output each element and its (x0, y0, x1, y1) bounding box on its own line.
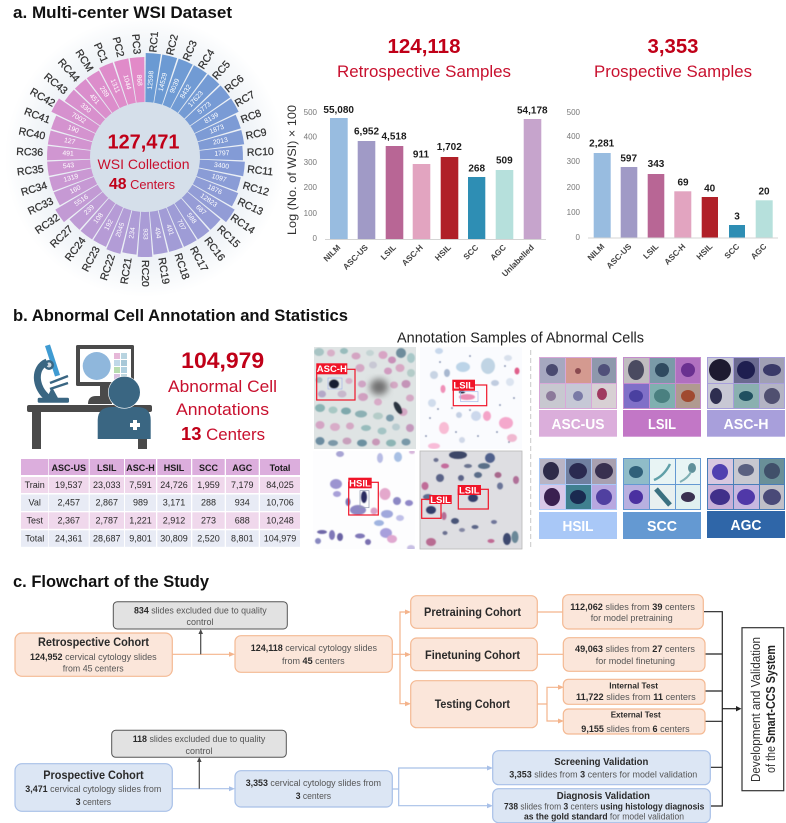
sector: RC10 (195, 145, 274, 162)
sector: RC18: 491 (164, 224, 175, 237)
sector: RC36: 491 (62, 150, 74, 158)
table: annotation counts by split: 3,171 (163, 498, 185, 508)
tile: HSIL: HSIL (562, 518, 594, 535)
sector: RC34: RC34 (20, 180, 49, 199)
sector: RC7: 8139 (203, 112, 220, 125)
bar chart: retrospective samples: 54,178 (517, 106, 548, 116)
sector: RC41: RC41 (22, 106, 52, 126)
table: annotation counts by split (21, 459, 300, 547)
bar chart: retrospective samples: 500 (304, 108, 318, 117)
sector: RC36 (16, 145, 95, 162)
box: prospective cohort: 3,471 cervical cytology slides from (25, 784, 161, 795)
box: pretraining cohort (411, 596, 537, 628)
sector: RCM (72, 47, 124, 119)
table: annotation counts by split: 2,520 (197, 534, 220, 544)
icon: pathologist at microscope and monitor (27, 344, 152, 449)
sector: RC44: RC44 (55, 57, 82, 85)
flow lines: retrospective connectors (172, 610, 564, 724)
chart: circular bar chart of WSI collection by center (5, 17, 285, 297)
sector: RC18 (154, 202, 193, 282)
sector: RC43: RC43 (41, 71, 70, 97)
sector: RC22: RC22 (98, 253, 118, 282)
sector: RC24: RC24 (63, 235, 89, 264)
box: internal test: Internal Test (609, 681, 658, 691)
sector: RC20: 933 (142, 228, 148, 240)
heading: annotation samples: Annotation Samples of Abnormal Cells (397, 330, 644, 347)
box: pretraining slides (563, 595, 703, 629)
tile: HSIL (539, 458, 617, 539)
callout: abnormal cell annotations (168, 348, 277, 444)
micrograph: ASC-H annotation sample (314, 347, 416, 449)
box: diagnosis validation: 738 slides from 3 centers using histology diagnosis (504, 802, 704, 812)
table: annotation counts by split: 9,801 (129, 534, 152, 544)
bar chart: retrospective samples: 4,518 (381, 132, 407, 142)
sector: RC20: RC20 (139, 260, 151, 287)
sector: RC40 (17, 124, 97, 154)
center disc with collection totals: WSI Collection (98, 156, 190, 172)
sector: RC42 (27, 84, 106, 139)
sector: PC2: PC2 (110, 36, 126, 59)
sector: RC14: 12823 (199, 192, 218, 209)
box: 124,118 slides (235, 636, 392, 672)
callout: abnormal cell annotations: 104,979 (181, 348, 264, 373)
box: 834 slides excluded (113, 602, 287, 629)
table: annotation counts by split: 2,867 (96, 498, 118, 508)
table: annotation counts by split: Train (25, 480, 45, 490)
sector: RC10: 1797 (214, 150, 230, 158)
center disc with collection totals: 48 Centers (109, 176, 175, 193)
box: diagnosis validation (493, 789, 710, 823)
sector: RC23: 192 (103, 218, 115, 232)
sector: RC1: RC1 (147, 31, 161, 53)
flow lines: prospective connectors (172, 757, 493, 808)
sector: PC2: 1044 (121, 74, 132, 91)
table: annotation counts by split: 1,959 (197, 480, 220, 490)
bar chart: retrospective samples: ASC-H (400, 243, 425, 268)
box: retrospective cohort: from 45 centers (63, 664, 124, 675)
bar chart: retrospective samples (304, 105, 548, 279)
sector: RC8 (189, 106, 264, 146)
table: annotation counts by split: 1,221 (129, 516, 152, 526)
sector: RC4: 8432 (179, 83, 193, 100)
sector: RC7: RC7 (233, 89, 257, 110)
sector: RC19: RC19 (155, 257, 172, 285)
sector: RCM: 289 (98, 85, 110, 99)
box: testing cohort: Testing Cohort (435, 699, 510, 711)
box: internal test: 11,722 slides from 11 centers (576, 692, 696, 703)
table: annotation counts by split: AGC (232, 463, 253, 473)
sector: RC36: RC36 (16, 146, 43, 159)
sector: RC43 (41, 70, 111, 131)
bar chart: prospective samples: 597 (620, 154, 637, 164)
sector: RC34 (19, 164, 99, 200)
sector: RC6: 5773 (197, 101, 213, 116)
sector: RC17: RC17 (187, 245, 210, 274)
box: diagnosis validation: Diagnosis Validation (557, 790, 650, 802)
sector: RC15: RC15 (214, 223, 242, 251)
bar chart: prospective samples: 100 (567, 208, 581, 217)
tile: LSIL: LSIL (648, 416, 676, 433)
table: annotation counts by split: 688 (235, 516, 250, 526)
sector: RC12 (191, 164, 271, 200)
bar chart: retrospective samples: ASC-US (341, 243, 370, 272)
bar chart: prospective samples: LSIL (641, 242, 660, 261)
box: testing cohort (411, 681, 537, 728)
sector: RC12: RC12 (241, 180, 271, 199)
sector: RC13: 1876 (206, 184, 223, 197)
box: 118 slides excluded (112, 730, 286, 757)
table: annotation counts by split: Val (29, 498, 41, 508)
sector: RC10: RC10 (247, 146, 274, 159)
table: annotation counts by split: 273 (201, 516, 216, 526)
table: annotation counts by split: 19,537 (55, 480, 83, 490)
sector: RC5: RC5 (210, 59, 233, 82)
bar chart: prospective samples (567, 108, 778, 271)
box: 834 slides excluded: control (186, 617, 214, 628)
sector: RC21: 234 (128, 227, 137, 239)
tile: ASC-US: ASC-US (552, 416, 604, 433)
box: 834 slides excluded: 834 slides excluded due to quality (134, 605, 267, 616)
sector: RC8: RC8 (239, 107, 263, 126)
bar chart: prospective samples: AGC (749, 242, 768, 261)
sector: RC17: 707 (175, 219, 187, 232)
bar chart: retrospective samples: Unlabelled (500, 243, 536, 279)
sector: RC18: RC18 (172, 252, 192, 281)
sector: PC3 (128, 33, 148, 108)
bar chart: retrospective samples: SCC (462, 243, 480, 262)
heading: section b: b. Abnormal Cell Annotation and Statistics (13, 307, 348, 325)
sector: RC3 (158, 38, 201, 114)
table: annotation counts by split: 23,033 (93, 480, 121, 490)
sector: RC27: RC27 (48, 223, 76, 251)
sector: RC13: RC13 (235, 196, 265, 218)
sector: RC6 (179, 71, 248, 131)
table: annotation counts by split: 24,726 (160, 480, 188, 490)
box: prospective cohort: Prospective Cohort (43, 768, 144, 782)
heading: retrospective samples total: Retrospective Samples (337, 62, 511, 81)
sector: RC40: RC40 (18, 125, 46, 143)
bar chart: retrospective samples: 509 (496, 156, 513, 166)
sector: PC1: PC1 (91, 41, 110, 65)
bar chart: prospective samples: 3 (734, 212, 740, 222)
bar chart: prospective samples: ASC-US (605, 242, 634, 271)
sector: RC5: 17623 (187, 90, 205, 109)
box: pretraining cohort: Pretraining Cohort (424, 607, 521, 619)
box: retrospective cohort: Retrospective Cohort (38, 637, 149, 649)
sector: RC33: RC33 (26, 195, 56, 218)
bar chart: retrospective samples: 300 (304, 158, 318, 167)
table: annotation counts by split: 2,912 (163, 516, 185, 526)
bar chart: retrospective samples: LSIL (379, 243, 398, 262)
table: annotation counts by split: 10,706 (266, 498, 294, 508)
sector: RC1 (141, 31, 163, 108)
sector: RC34: 1319 (63, 173, 80, 184)
sector: RC7 (184, 87, 258, 139)
sector: RC43: 330 (79, 102, 92, 115)
sector: RC11: 3400 (214, 162, 230, 171)
box: finetuning cohort: Finetuning Cohort (425, 650, 520, 662)
tile: LSIL (623, 357, 701, 437)
sector: RC41: 190 (66, 124, 80, 135)
sector: RC21: RC21 (118, 257, 135, 285)
bar chart: retrospective samples: 55,080 (323, 105, 354, 116)
bar chart: prospective samples: 500 (567, 108, 581, 117)
callout: abnormal cell annotations: 13 Centers (181, 424, 265, 444)
bar chart: prospective samples: 400 (567, 132, 581, 141)
sector: RC14 (182, 179, 258, 238)
sector: RC11 (194, 156, 274, 180)
bar chart: retrospective samples: 100 (304, 209, 318, 218)
sector: RC9: RC9 (245, 126, 268, 142)
sector: RC32 (32, 179, 108, 238)
sector: RC27: 239 (83, 204, 96, 217)
table: annotation counts by split: ASC-US (52, 463, 86, 473)
bar chart: prospective samples: NILM (586, 242, 607, 263)
table: annotation counts by split: ASC-H (126, 463, 155, 473)
heading: prospective samples total: 3,353 (648, 36, 698, 58)
heading: section a: a. Multi-center WSI Dataset (13, 4, 233, 22)
sector: RC22: 2045 (115, 222, 126, 238)
sector: RC16: 588 (185, 212, 198, 225)
bar chart: retrospective samples: NILM (322, 243, 343, 264)
sector: RC24: 108 (93, 212, 105, 225)
sector: RC2 (150, 33, 182, 110)
box: screening validation: 3,353 slides from 3 centers for model validation (509, 770, 697, 781)
sector: RC33 (26, 172, 103, 219)
table: annotation counts by split: SCC (199, 463, 218, 473)
sector: RC19: 494 (153, 227, 162, 239)
sector: RC15: 687 (194, 204, 207, 217)
bar chart: prospective samples: 69 (677, 178, 689, 188)
box: retrospective cohort (15, 633, 172, 676)
tile: AGC: AGC (730, 517, 762, 534)
sector: RC22 (97, 202, 136, 282)
tile: SCC: SCC (647, 518, 677, 535)
sector: PC2 (108, 35, 140, 110)
bar chart: retrospective samples: HSIL (433, 243, 453, 263)
table: annotation counts by split: 2,787 (96, 516, 118, 526)
box: external test: External Test (611, 710, 661, 720)
center disc with collection totals: 127,471 (108, 132, 180, 154)
sector: RC44: 451 (88, 93, 101, 106)
sector: RC9 (193, 125, 268, 154)
table: annotation counts by split: 2,367 (58, 516, 80, 526)
bar chart: retrospective samples: 911 (413, 150, 430, 160)
box: finetuning slides: for model finetuning (596, 656, 675, 667)
box: 3,353 slides: 3,353 cervical cytology slides from (246, 778, 381, 789)
micrograph: two LSIL annotation samples: LSIL (430, 495, 451, 506)
micrograph: HSIL annotation sample: HSIL (349, 478, 371, 489)
bar chart: prospective samples: HSIL (695, 242, 714, 262)
callout: abnormal cell annotations: Abnormal Cell (168, 378, 277, 396)
box: 124,118 slides: from 45 centers (282, 656, 345, 667)
bar chart: retrospective samples: 400 (304, 132, 318, 141)
sector: RC40: 127 (63, 137, 76, 146)
box: diagnosis validation: as the gold standard for model validation (524, 812, 684, 822)
sector: RC3: 9039 (169, 78, 181, 95)
sector: RC3: RC3 (181, 39, 200, 63)
micrograph: two LSIL annotation samples (420, 451, 522, 549)
table: annotation counts by split: 7,591 (129, 480, 152, 490)
micrograph: ASC-H annotation sample: ASC-H (317, 364, 347, 375)
table: annotation counts by split: 2,457 (58, 498, 80, 508)
tile: ASC-H: ASC-H (724, 416, 768, 433)
sector: RC4 (165, 46, 219, 119)
tile: ASC-H (707, 357, 785, 437)
tile: ASC-US (539, 357, 617, 437)
bar chart: retrospective samples: 268 (468, 164, 485, 174)
box: 124,118 slides: 124,118 cervical cytology slides (251, 643, 377, 654)
sector: RC16 (169, 193, 228, 264)
flow lines: convergence to system box (704, 612, 742, 806)
sector: RC1: 12598 (147, 70, 155, 90)
sector: RC8: 1873 (209, 124, 225, 136)
tile: SCC (623, 458, 701, 539)
sector: RC35: RC35 (16, 163, 45, 178)
sector: RC42: RC42 (28, 86, 57, 110)
bar chart: retrospective samples: 0 (313, 234, 318, 243)
sector: RC17 (162, 198, 211, 275)
bar chart: prospective samples: ASC-H (663, 242, 687, 267)
table: annotation counts by split: LSIL (97, 463, 117, 473)
box: internal test (563, 679, 705, 704)
table: annotation counts by split: Total (270, 463, 290, 473)
sector: RC13 (187, 172, 266, 219)
bar chart: retrospective samples: 200 (304, 183, 318, 192)
sector: RC33: 160 (69, 184, 82, 196)
sector: RC2: 14529 (158, 72, 169, 92)
box: prospective cohort: 3 centers (76, 797, 111, 808)
sector: RC27 (47, 186, 114, 251)
sector: RC32: 5516 (73, 193, 90, 208)
bar chart: retrospective samples: 6,952 (354, 126, 379, 138)
bar chart: prospective samples: 0 (576, 233, 581, 242)
table: annotation counts by split: 7,179 (231, 480, 254, 490)
sector: RC15 (176, 186, 243, 251)
micrograph: LSIL annotation sample (420, 347, 522, 449)
bar chart: retrospective samples: AGC (489, 243, 508, 262)
box: pretraining slides: for model pretraining (591, 613, 673, 624)
table: annotation counts by split: 8,801 (231, 534, 254, 544)
box: pretraining slides: 112,062 slides from 39 centers (570, 602, 695, 613)
box: screening validation (493, 751, 710, 785)
table: annotation counts by split: Test (26, 516, 43, 526)
micrograph: two LSIL annotation samples: LSIL (459, 486, 480, 496)
sector: RC2: RC2 (164, 33, 181, 56)
box: retrospective cohort: 124,952 cervical cytology slides (30, 652, 157, 663)
micrograph: LSIL annotation sample: LSIL (453, 381, 474, 392)
box: 118 slides excluded: control (186, 746, 212, 757)
bar chart: prospective samples: 40 (704, 184, 716, 194)
table: annotation counts by split: 104,979 (264, 534, 296, 544)
sector: RC41 (22, 105, 101, 146)
bar chart: prospective samples: 2,281 (589, 138, 615, 150)
table: annotation counts by split: HSIL (164, 463, 185, 473)
sector: RC16: RC16 (201, 235, 227, 264)
box: 118 slides excluded: 118 slides excluded due to quality (133, 734, 266, 745)
bar chart: prospective samples: 200 (567, 183, 581, 192)
table: annotation counts by split: 934 (235, 498, 250, 508)
heading: retrospective samples total (337, 36, 511, 81)
sector: RCM: RCM (73, 47, 96, 74)
box: development and validation of the Smart-CCS system: of the Smart-CCS System (764, 645, 778, 773)
box: development and validation of the Smart-CCS system: Development and Validation (749, 637, 763, 782)
sector: RC14: RC14 (228, 212, 257, 237)
box: prospective cohort (15, 764, 172, 811)
sector: RC6: RC6 (223, 73, 247, 95)
table: annotation counts by split: 10,248 (266, 516, 294, 526)
table: annotation counts by split: Total (25, 534, 44, 544)
table: annotation counts by split: 30,809 (160, 534, 188, 544)
box: external test: 9,155 slides from 6 centers (581, 724, 690, 735)
sector: RC32: RC32 (33, 212, 62, 237)
table: annotation counts by split: 24,361 (55, 534, 83, 544)
box: 3,353 slides (235, 771, 392, 807)
sector: PC3: 868 (135, 74, 143, 86)
sector: RC19 (146, 205, 173, 285)
heading: prospective samples total: Prospective Samples (594, 62, 752, 81)
micrograph: HSIL annotation sample (313, 450, 415, 551)
sector: RC24 (62, 193, 121, 264)
box: 3,353 slides: 3 centers (296, 791, 331, 802)
box: finetuning slides (563, 638, 705, 671)
sector: RC5 (172, 57, 234, 125)
sector: RC12: 1097 (211, 173, 227, 184)
table: annotation counts by split: 28,687 (93, 534, 121, 544)
sector: RC44 (54, 56, 117, 124)
center disc with collection totals (90, 102, 200, 212)
sector: PC1: 1311 (109, 78, 121, 94)
sector: RC11: RC11 (247, 163, 274, 178)
heading: retrospective samples total: 124,118 (388, 36, 460, 58)
bar chart: prospective samples: 20 (758, 186, 770, 198)
sector: RC35 (16, 156, 96, 180)
box: development and validation of the Smart-CCS system (742, 628, 784, 791)
tile: AGC (707, 458, 785, 538)
bar chart: retrospective samples: 1,702 (437, 142, 462, 153)
sector: PC3: PC3 (129, 33, 143, 55)
sector: RC42: 7002 (70, 112, 87, 125)
box: screening validation: Screening Validation (554, 756, 648, 768)
table: annotation counts by split: 288 (201, 498, 216, 508)
box: finetuning slides: 49,063 slides from 27 centers (575, 644, 695, 655)
axis title: Log (No. of WSI) × 100 (285, 105, 299, 235)
box: external test (563, 709, 705, 735)
sector: RC35: 543 (63, 162, 75, 170)
callout: abnormal cell annotations: Annotations (176, 401, 269, 419)
sector: RC9: 2013 (212, 137, 229, 147)
sector: PC1 (90, 41, 132, 114)
bar chart: prospective samples: SCC (723, 242, 741, 261)
heading: prospective samples total (594, 36, 752, 81)
bar chart: prospective samples: 300 (567, 157, 581, 166)
table: annotation counts by split: 989 (133, 498, 148, 508)
heading: section c: c. Flowchart of the Study (13, 573, 210, 591)
sector: RC20 (138, 207, 152, 287)
sector: RC4: RC4 (196, 47, 217, 71)
sector: RC23 (79, 198, 128, 274)
sector: RC21 (117, 205, 144, 285)
sector: RC23: RC23 (80, 244, 103, 274)
table: annotation counts by split: 84,025 (266, 480, 294, 490)
box: finetuning cohort (411, 638, 537, 671)
bar chart: prospective samples: 343 (648, 159, 665, 170)
